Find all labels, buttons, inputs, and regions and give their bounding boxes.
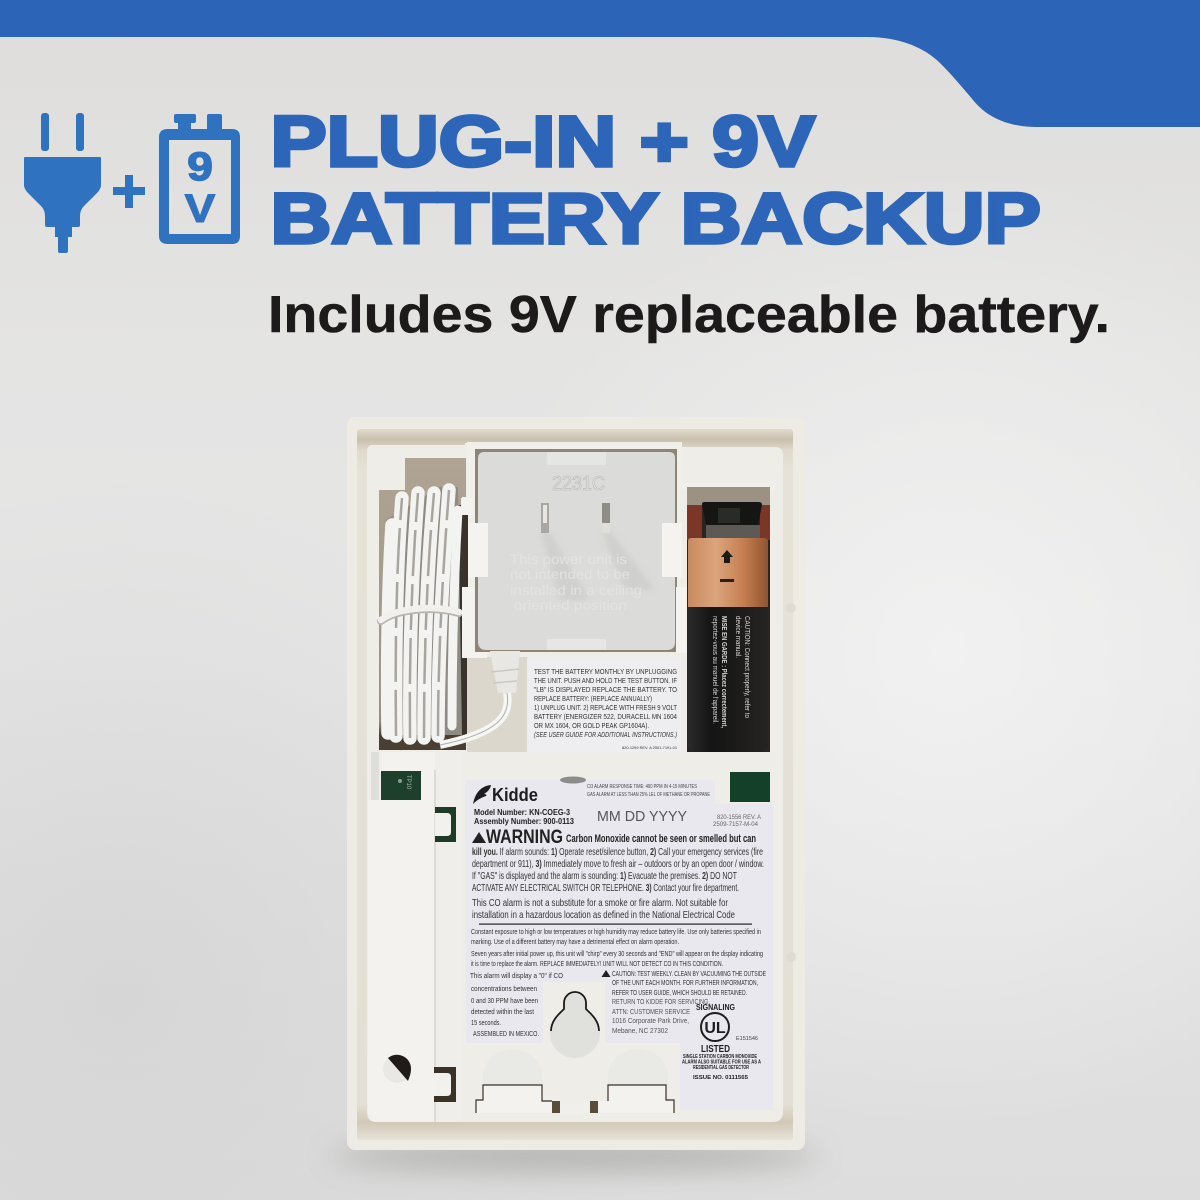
back plate — [367, 443, 783, 1122]
caution text: 1016 Corporate Park Drive, — [612, 1018, 689, 1025]
title — [270, 103, 1041, 258]
icon: power plug — [24, 113, 101, 253]
title: PLUG-IN + 9V — [270, 103, 815, 182]
caution text: Mebane, NC 27302 — [612, 1028, 668, 1035]
green circuit windows: TP10 — [405, 775, 411, 790]
outer shell — [347, 417, 805, 1150]
device: CO alarm back — [347, 417, 805, 1150]
battery instruction sticker — [527, 658, 683, 753]
date code: MM DD YYYY — [597, 808, 687, 825]
zero display note: concentrations between — [471, 986, 537, 993]
battery and end of life notes — [471, 929, 763, 968]
warning heading — [472, 827, 756, 848]
response time note: GAS ALARM AT LESS THAN 25% LEL OF METHANE OR PROPANE — [587, 792, 710, 798]
side clips — [461, 498, 687, 658]
power adapter: oriented position — [514, 597, 627, 613]
battery instruction sticker: "LB" IS DISPLAYED REPLACE THE BATTERY. TO — [534, 687, 677, 694]
response time note: CO ALARM RESPONSE TIME: 400 PPM IN 4-15 MINUTES — [587, 784, 697, 790]
side screw bosses — [786, 603, 796, 962]
warning heading: Carbon Monoxide cannot be seen or smelled but can — [566, 833, 756, 845]
caution text: ATTN: CUSTOMER SERVICE — [612, 1009, 690, 1016]
left side door — [368, 752, 462, 1122]
warning body: installation in a hazardous location as defined in the National Electrical Code — [472, 909, 735, 921]
battery and end of life notes: Constant exposure to high or low temperatures or high humidity may reduce battery life. Use only batteries specified in — [471, 929, 761, 936]
mounting hole — [383, 1055, 411, 1083]
UL listed mark: RESIDENTIAL GAS DETECTOR — [693, 1065, 749, 1071]
battery instruction sticker: REPLACE BATTERY: (REPLACE ANNUALLY) — [534, 696, 652, 703]
icon: plus sign — [113, 175, 145, 208]
battery instruction sticker: 1) UNPLUG UNIT. 2) REPLACE WITH FRESH 9 VOLT — [534, 705, 678, 712]
subtitle: Includes 9V replaceable battery. — [268, 286, 1110, 344]
caution text — [602, 970, 766, 1035]
battery and end of life notes: Seven years after initial power up, this unit will "chirp" every 30 seconds and "END" will appear on the display indicating — [471, 951, 763, 958]
battery instruction sticker: 820-1299 REV. A 2501-7191-01 — [622, 745, 678, 750]
UL listed mark — [682, 1003, 761, 1081]
snap tabs — [476, 1049, 674, 1113]
warning body: This CO alarm is not a substitute for a smoke or fire alarm. Not suitable for — [472, 897, 728, 909]
zip tie — [381, 609, 459, 621]
battery caution text: reportez-vous au manuel de l'appareil. — [711, 616, 720, 724]
upper side latch — [435, 807, 456, 842]
battery instruction sticker: BATTERY (ENERGIZER 522, DURACELL MN 1604 — [534, 714, 677, 721]
warning body: department or 911), 3) Immediately move to fresh air – outdoors or by an open door / window. — [472, 858, 764, 870]
battery caution text — [711, 616, 752, 728]
Kidde logo: Kidde — [492, 784, 538, 805]
Kidde logo — [473, 784, 538, 805]
caution text: OF THE UNIT EACH MONTH. FOR FURTHER INFORMATION, — [612, 980, 758, 987]
model numbers: Assembly Number: 900-0113 — [474, 816, 574, 826]
battery caution text: MISE EN GARDE : Placez correctement, — [720, 616, 729, 728]
battery and end of life notes: it is time to replace the alarm. REPLACE IMMEDIATELY! UNIT WILL NOT DETECT CO IN THIS CONDITION. — [471, 961, 723, 968]
green circuit windows — [381, 771, 770, 802]
minus mark — [720, 579, 734, 582]
9V battery — [688, 502, 768, 752]
polarity arrow — [721, 550, 733, 563]
battery instruction sticker: OR MX 1604, OR GOLD PEAK GP1604A). — [534, 723, 649, 730]
warning body: ACTIVATE ANY ELECTRICAL SWITCH OR TELEPHONE. 3) Contact your fire department. — [472, 882, 739, 894]
UL listed mark: UL — [704, 1020, 726, 1037]
icon: 9V battery — [159, 114, 240, 244]
revision code: 820-1556 REV. A — [717, 814, 762, 821]
main warning label — [465, 776, 773, 1110]
cord compartment — [379, 458, 528, 752]
embossed text: 2231C — [552, 473, 605, 495]
UL listed mark: SINGLE STATION CARBON MONOXIDE — [683, 1054, 758, 1060]
title: BATTERY BACKUP — [270, 178, 1041, 258]
warning body: If "GAS" is displayed and the alarm is sounding: 1) Evacuate the premises. 2) DO NOT — [472, 870, 737, 882]
UL listed mark: LISTED — [701, 1044, 730, 1055]
zero display note: 0 and 30 PPM have been — [471, 998, 538, 1005]
UL listed mark: E151546 — [736, 1036, 758, 1042]
UL listed mark: SIGNALING — [696, 1003, 735, 1012]
side latch — [433, 1067, 456, 1102]
battery instruction sticker: THE UNIT. PUSH AND HOLD THE TEST BUTTON. IF — [534, 678, 677, 685]
UL listed mark: ISSUE NO. 0111565 — [693, 1075, 748, 1081]
cord strain relief — [440, 651, 520, 745]
battery compartment — [680, 482, 776, 752]
battery instruction sticker: TEST THE BATTERY MONTHLY BY UNPLUGGING — [534, 669, 677, 676]
device shadow — [330, 1140, 820, 1172]
response time note — [587, 784, 710, 798]
inner recess — [357, 429, 793, 1140]
revision code — [713, 814, 762, 828]
top blue banner with curved corner — [0, 0, 1200, 127]
battery and end of life notes: marking. Use of a different battery may have a detrimental effect on alarm operation. — [471, 939, 679, 946]
warning body — [472, 846, 764, 921]
power adapter: not intended to be — [510, 566, 630, 582]
power adapter: installed in a ceiling — [510, 582, 642, 598]
zero display note: ASSEMBLED IN MEXICO. — [473, 1031, 539, 1038]
battery caution text: device manual. — [734, 616, 743, 658]
zero display note: detected within the last — [471, 1009, 534, 1016]
warning heading: WARNING — [486, 827, 563, 848]
prong shadows — [541, 531, 655, 600]
coiled power cord — [381, 487, 462, 738]
zero display note — [470, 973, 564, 1038]
revision code: 2509-7157-M-04 — [713, 821, 758, 828]
icon: 9V battery: 9 — [187, 145, 213, 189]
power adapter: This power unit is — [510, 551, 627, 567]
printed cord stripes — [396, 490, 449, 738]
keyhole mount — [550, 991, 600, 1058]
plug holder frame — [462, 442, 682, 657]
caution text: RETURN TO KIDDE FOR SERVICING. — [612, 999, 710, 1006]
caution text: REFER TO USER GUIDE, WHICH SHOULD BE RETAINED. — [612, 990, 747, 997]
model numbers: Model Number: KN-COEG-3 — [474, 807, 570, 817]
battery instruction sticker: (SEE USER GUIDE FOR ADDITIONAL INSTRUCTIONS.) — [534, 732, 677, 739]
caution text: CAUTION: TEST WEEKLY. CLEAN BY VACUUMING THE OUTSIDE — [612, 971, 766, 978]
warning body: kill you. If alarm sounds: 1) Operate reset/silence button, 2) Call your emergency services (fire — [472, 846, 763, 858]
UL listed mark: ALARM ALSO SUITABLE FOR USE AS A — [682, 1060, 761, 1066]
battery caution text: CAUTION: Connect properly, refer to — [743, 616, 752, 718]
zero display note: This alarm will display a "0" if CO — [470, 973, 564, 980]
zero display note: 15 seconds. — [471, 1020, 501, 1027]
prongs — [541, 503, 549, 533]
icon: 9V battery: V — [185, 187, 216, 231]
power adapter — [478, 452, 675, 650]
model numbers — [474, 807, 574, 826]
